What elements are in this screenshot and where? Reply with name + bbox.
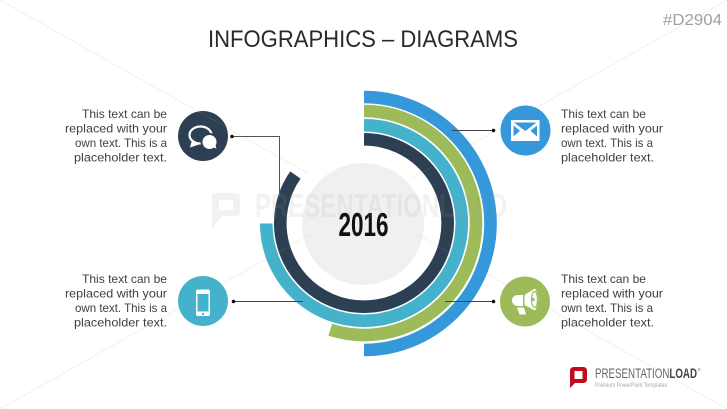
- text block: bottom left: [65, 272, 167, 330]
- year label: 2016: [338, 206, 388, 243]
- text block: top left: placeholder text.: [74, 150, 167, 164]
- text block: bottom left: This text can be: [82, 272, 167, 286]
- arc: navy: [280, 139, 448, 307]
- text block: bottom right: own text. This is a: [561, 301, 653, 315]
- title: INFOGRAPHICS – DIAGRAMS: [208, 26, 518, 53]
- text block: top left: [65, 107, 167, 164]
- text block: bottom right: [561, 272, 663, 330]
- center disc: [302, 163, 424, 285]
- logo: PresentationLoad: ®: [698, 366, 702, 372]
- watermark: [212, 187, 507, 228]
- text block: top right: replaced with your: [561, 122, 663, 136]
- text block: bottom right: placeholder text.: [561, 316, 654, 330]
- text block: top left: replaced with your: [65, 122, 167, 136]
- text block: top right: placeholder text.: [561, 150, 654, 164]
- logo: PresentationLoad: [570, 366, 702, 389]
- text block: top right: [561, 107, 663, 164]
- text block: bottom left: placeholder text.: [74, 316, 167, 330]
- text block: top right: own text. This is a: [561, 136, 653, 150]
- text block: bottom left: own text. This is a: [75, 301, 167, 315]
- text block: bottom right: This text can be: [561, 272, 646, 286]
- logo: PresentationLoad: Premium PowerPoint Templates: [595, 382, 668, 389]
- arc: teal: [266, 125, 462, 321]
- text block: bottom left: replaced with your: [65, 286, 167, 300]
- arc: green: [330, 111, 476, 335]
- reference code: #D2904: [663, 12, 722, 29]
- icon: speech bubbles: [178, 111, 228, 161]
- ring chart: [266, 97, 491, 350]
- arc: blue: [364, 97, 491, 350]
- connector: bottom right: [445, 300, 495, 303]
- text block: bottom right: replaced with your: [561, 286, 663, 300]
- connector: top left: [230, 135, 280, 196]
- icon: envelope: [500, 106, 550, 156]
- connector: top right: [452, 129, 495, 132]
- watermark: PRESENTATIONLOAD: [255, 187, 507, 224]
- connector: bottom left: [232, 300, 303, 303]
- icon: smartphone: [178, 276, 228, 326]
- text block: top right: This text can be: [561, 107, 646, 121]
- text block: top left: This text can be: [82, 107, 167, 121]
- logo: PresentationLoad: PRESENTATIONLOAD: [595, 366, 697, 381]
- icon: megaphone: [500, 276, 550, 326]
- text block: top left: own text. This is a: [75, 136, 167, 150]
